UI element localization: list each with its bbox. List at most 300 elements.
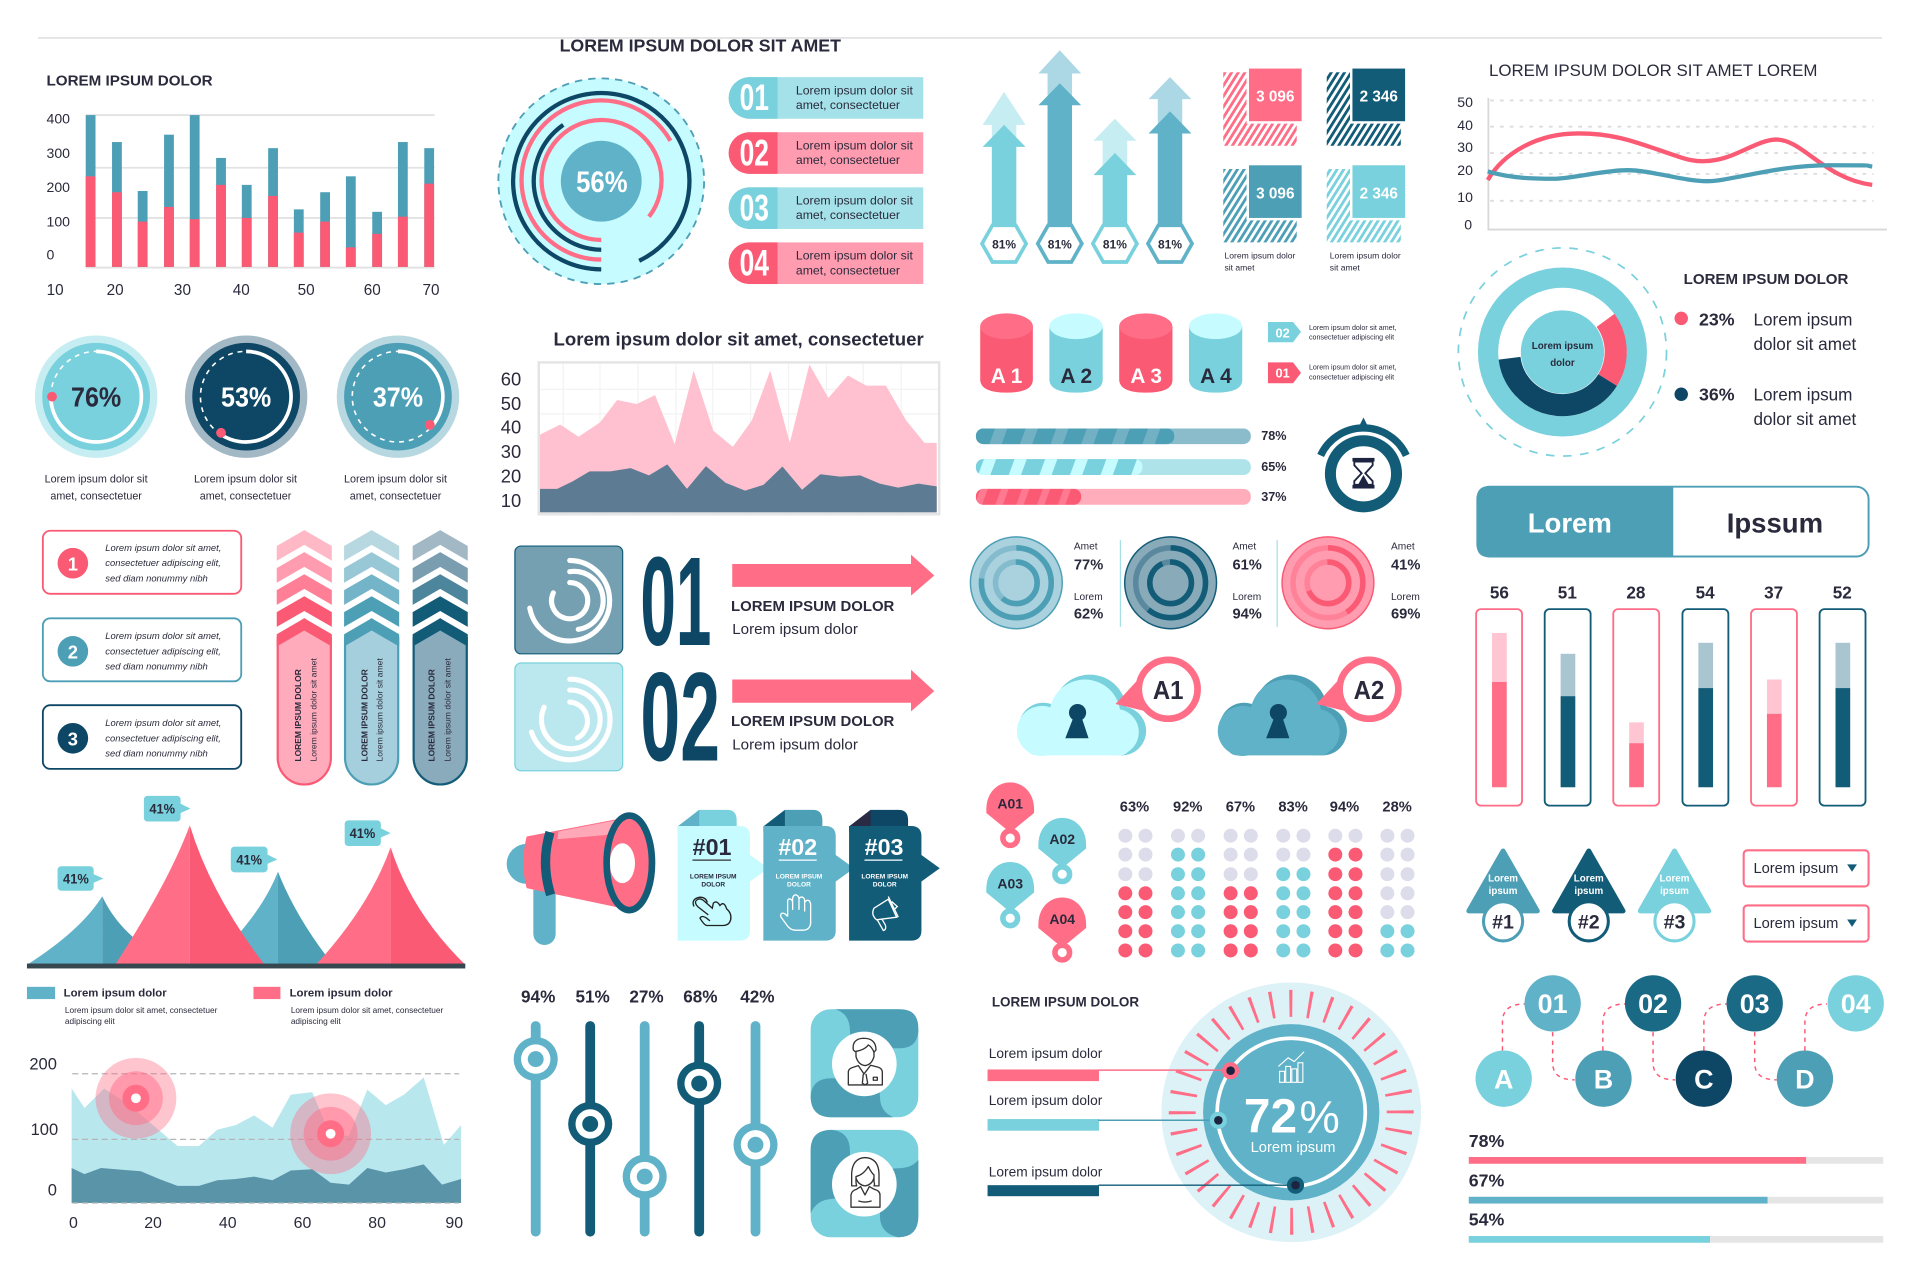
thermometer 28: 28 [1626,583,1645,603]
list item 01 [729,77,923,119]
line chart: LOREM IPSUM DOLOR SIT AMET LOREM [1489,61,1818,80]
area chart: lorem ipsum dolor sit amet, consectetuer: 30 [501,441,521,462]
callout box 3: sed diam nonummy nibh [105,748,208,759]
thermometer 51 [1545,583,1591,806]
slider 68% [677,1021,721,1237]
cylinder A4 [1189,313,1242,393]
dial callout 3 [988,1165,1304,1196]
area chart: lorem ipsum dolor sit amet, consectetuer: 40 [501,416,521,437]
41% label c: 41% [236,852,262,867]
chevron ribbon teal [344,530,399,784]
dial callout 1 [988,1046,1239,1081]
slider 27% [623,1021,667,1237]
donut legend: 23% [1699,310,1735,330]
toggle: lorem / ipssum [1477,486,1869,557]
icon: open hand [781,895,811,930]
bar chart: lorem ipsum dolor: 50 [298,282,315,299]
donut legend: dolor sit amet [1753,334,1857,354]
dot matrix chart: 28% [1382,800,1412,816]
triangle badge #3: #3 [1664,912,1685,934]
list item 02: Lorem ipsum dolor sit [796,138,913,152]
gauge 76%: 76% [71,381,121,412]
dot matrix chart: 83% [1278,800,1308,816]
up arrows with hexagons [982,50,1192,262]
node B [1575,1050,1632,1107]
node C [1676,1050,1732,1107]
step 02: Lorem ipsum dolor [732,736,858,753]
pin A04: A04 [1049,911,1075,927]
avatar female [811,1130,918,1237]
41% label b [144,796,190,822]
legend [27,987,444,1026]
callout box 1: sed diam nonummy nibh [105,573,208,584]
pin A03 [986,862,1034,926]
arrow 2: 81% [1048,238,1072,252]
area chart: lorem ipsum dolor sit amet, consectetuer [501,328,939,514]
callout box 1: Lorem ipsum dolor sit amet, [105,542,221,553]
concentric rings 3: Amet [1391,542,1415,553]
card #02 [763,810,854,941]
numbered list 01-04 [729,77,923,284]
icon: growth chart [1278,1052,1304,1082]
slider group: 42% [740,987,774,1007]
stat tile navy [1327,69,1405,146]
chevron ribbon teal: LOREM IPSUM DOLOR [359,669,369,762]
gauge 37%: Lorem ipsum dolor sit [344,473,447,485]
pin A02 [1038,818,1086,882]
donut chart [1458,248,1667,456]
tag 02: Lorem ipsum dolor sit amet, [1309,324,1397,332]
card #02: LOREM IPSUM [776,873,823,880]
thermometer 37 [1751,583,1797,806]
card #03 [849,810,940,941]
callout box 2: Lorem ipsum dolor sit amet, [105,630,221,641]
stat tile teal [1223,165,1302,273]
callout box 2: sed diam nonummy nibh [105,661,208,672]
bar chart: lorem ipsum dolor: 20 [107,282,124,299]
donut legend: LOREM IPSUM DOLOR [1684,271,1848,288]
node 04 [1828,975,1884,1032]
gauge 53%: 53% [221,381,271,412]
stat tile light teal: 2 346 [1360,185,1398,202]
concentric rings 1: Amet [1074,542,1098,553]
radial gauge 56% [498,78,704,284]
donut legend: dolor sit amet [1753,409,1857,429]
card #03: LOREM IPSUM [861,873,909,880]
node 03 [1727,975,1783,1032]
cylinder A3 [1119,313,1172,393]
area chart with target markers: 100 [31,1120,58,1139]
cloud A1 with bubble [1017,660,1198,756]
stat tile light teal: Lorem ipsum dolor [1330,250,1401,260]
gauge 76%: amet, consectetuer [50,491,142,503]
stat tile navy: 2 346 [1360,89,1398,106]
stat tile pink [1223,69,1302,146]
concentric rings 2: Amet [1232,542,1256,553]
node B: B [1594,1064,1613,1094]
thermometer 54 [1682,583,1728,806]
line chart: 50 [1457,94,1473,110]
progress bars [976,429,1286,505]
arrow 3 [1093,119,1137,262]
thermometer 52: 52 [1833,583,1852,603]
tag 01 [1268,362,1397,383]
node 01: 01 [1538,989,1568,1019]
dot column 63% [1118,829,1152,957]
slider 94% [514,1021,558,1237]
concentric rings 3: 41% [1391,557,1420,573]
radial gauge 56%: 56% [576,166,628,199]
bar chart: lorem ipsum dolor: 100 [47,214,70,230]
chevron ribbon pink: Lorem ipsum dolor sit amet [309,658,319,762]
concentric rings 1 [970,537,1103,629]
callout box 1: 1 [68,554,78,575]
area chart: lorem ipsum dolor sit amet, consectetuer: 50 [501,393,521,414]
triangle badge #3: ipsum [1660,886,1689,897]
target marker 2 [290,1093,371,1174]
tag 02 [1268,322,1397,342]
progress bars: 78% [1261,429,1286,443]
line chart: 40 [1457,117,1473,133]
line chart [1457,61,1887,233]
step 01: LOREM IPSUM DOLOR [731,598,895,615]
node A [1476,1050,1532,1107]
dot matrix chart: 63% [1120,800,1149,816]
area chart with target markers: 80 [368,1215,386,1232]
41% label c [231,847,277,872]
thermometer 56: 56 [1490,583,1509,603]
line chart: 0 [1464,217,1472,233]
bar chart: lorem ipsum dolor [47,73,440,299]
pin A01: A01 [997,796,1023,812]
gauge 53%: Lorem ipsum dolor sit [194,473,297,485]
list item 04: amet, consectetuer [796,263,900,277]
dial callout 3: Lorem ipsum dolor [989,1165,1103,1180]
donut legend [1674,271,1857,429]
gauge 37% [337,335,459,503]
pin A03: A03 [997,875,1023,891]
avatar male [811,1009,918,1117]
area chart with target markers: 20 [144,1215,162,1232]
card #03: #03 [865,834,904,860]
bar chart: lorem ipsum dolor: 40 [233,282,250,299]
concentric rings 2: 61% [1232,557,1262,573]
dot matrix chart: 94% [1330,800,1359,816]
thermometer bars [1476,583,1866,806]
dot matrix chart [1118,800,1415,957]
horizontal bar 54%: 54% [1469,1210,1505,1230]
legend: Lorem ipsum dolor sit amet, consectetuer [291,1005,444,1015]
tag 01: 01 [1276,366,1290,381]
triangle badge #1: ipsum [1489,886,1518,897]
stat tile light teal [1327,165,1405,273]
tag 01: Lorem ipsum dolor sit amet, [1309,364,1397,372]
bar chart: lorem ipsum dolor: 60 [364,282,381,299]
icon: megaphone outline [873,897,898,931]
bar chart: lorem ipsum dolor: 10 [47,282,64,299]
heading: lorem ipsum dolor sit amet: LOREM IPSUM DOLOR SIT AMET [560,35,841,55]
progress bars: 37% [1261,490,1286,504]
callout box 2: 2 [68,642,78,663]
cloud A1 with bubble: A1 [1153,677,1183,705]
donut chart: dolor [1550,358,1575,369]
stat tile teal: sit amet [1224,263,1255,273]
chevron ribbon teal: Lorem ipsum dolor sit amet [375,658,385,762]
tag 01: consectetuer adipiscing elit [1309,374,1394,382]
step 02 [515,646,934,787]
41% label b: 41% [149,802,175,817]
mountain chart [27,796,465,968]
list item 01: Lorem ipsum dolor sit [796,83,913,97]
icon: stopwatch with hourglass [1321,418,1406,507]
bar chart: lorem ipsum dolor: 300 [47,145,70,161]
arrow 2 [1038,50,1082,262]
area chart with target markers: 60 [294,1215,311,1232]
bar chart: lorem ipsum dolor: 0 [47,247,55,263]
bar chart: lorem ipsum dolor: 200 [47,179,70,195]
horizontal bar 78% [1469,1131,1883,1164]
gauge 76% [35,335,157,503]
node C: C [1694,1064,1714,1094]
slider 42% [733,1021,778,1237]
step 01: 01 [640,531,711,672]
cloud A2 with bubble [1218,660,1398,756]
arrow 4: 81% [1158,238,1182,252]
triangle badge #1: Lorem [1488,874,1518,885]
horizontal bar 78%: 78% [1469,1131,1505,1151]
dot column 94% [1328,829,1362,957]
pin A01 [986,782,1034,845]
list item 03: amet, consectetuer [796,208,900,222]
legend: Lorem ipsum dolor sit amet, consectetuer [65,1005,218,1015]
legend: Lorem ipsum dolor [290,988,393,1000]
slider group [514,987,778,1237]
list item 04: 04 [740,242,769,283]
callout box 2 [43,618,241,681]
dot column 28% [1380,829,1415,957]
area chart with target markers: 90 [445,1215,463,1232]
slider 51% [568,1021,612,1237]
area chart: lorem ipsum dolor sit amet, consectetuer: 20 [501,465,521,486]
area chart: lorem ipsum dolor sit amet, consectetuer: 60 [501,369,521,390]
horizontal bar 67% [1469,1170,1883,1204]
card #01 [678,810,768,941]
area chart: lorem ipsum dolor sit amet, consectetuer: Lorem ipsum dolor sit amet, consectetuer [553,328,924,349]
concentric rings 1: 62% [1074,606,1103,622]
donut chart: Lorem ipsum [1532,341,1593,352]
dropdown 1 [1744,850,1869,886]
chevron ribbon navy: LOREM IPSUM DOLOR [427,669,437,762]
line chart: 30 [1457,139,1473,155]
toggle: lorem / ipssum: Lorem [1528,508,1612,539]
node A: A [1494,1064,1513,1094]
list item 02: amet, consectetuer [796,153,900,167]
chevron ribbon pink: LOREM IPSUM DOLOR [293,669,303,762]
triangle badge #3: Lorem [1660,874,1690,885]
concentric rings 3: Lorem [1391,592,1420,603]
list item 01: 01 [740,77,769,118]
cylinder A1: A 1 [991,365,1022,388]
chevron ribbon navy [413,530,468,784]
dropdown 2 [1744,905,1869,942]
stat tile teal: 3 096 [1256,185,1294,202]
triangle badge #2 [1554,851,1623,941]
list item 03: 03 [740,187,769,228]
cylinder A3: A 3 [1130,365,1162,388]
node 01 [1524,975,1581,1032]
arrow 1: 81% [992,238,1016,252]
cylinder A2: A 2 [1061,365,1092,388]
card #02: #02 [778,834,817,860]
arrow 3: 81% [1103,238,1127,252]
cylinder A4: A 4 [1200,365,1232,388]
stat tile teal: Lorem ipsum dolor [1224,250,1296,260]
41% label d [345,820,391,846]
thermometer 51: 51 [1558,583,1577,603]
area chart: lorem ipsum dolor sit amet, consectetuer: 10 [501,490,521,511]
thermometer 52 [1820,583,1866,806]
area chart with target markers: 40 [219,1215,237,1232]
icon: megaphone [507,816,652,945]
thermometer 56 [1476,583,1522,806]
bar chart: lorem ipsum dolor: LOREM IPSUM DOLOR [47,73,213,90]
41% label a [58,866,103,891]
arrow 1 [982,92,1026,262]
dropdown 2: Lorem ipsum [1753,916,1838,932]
bar chart: lorem ipsum dolor: 30 [174,282,191,299]
progress bars: 65% [1261,460,1286,474]
tag 02: 02 [1276,325,1290,340]
list item 02: 02 [740,132,769,173]
thermometer 28 [1613,583,1659,806]
card #01: LOREM IPSUM [690,873,737,880]
gauge 37%: amet, consectetuer [350,491,442,503]
thermometer 37: 37 [1764,583,1783,603]
donut legend: 36% [1699,384,1735,404]
callout box 3 [43,705,241,769]
callout box 1: consectetuer adipiscing elit, [105,557,221,568]
triangle badge #2: ipsum [1574,886,1603,897]
slider group: 51% [576,987,610,1007]
callout box 3: consectetuer adipiscing elit, [105,732,221,743]
horizontal bar 54% [1469,1210,1883,1243]
card #02: DOLOR [787,881,811,888]
cloud A2 with bubble: A2 [1354,677,1384,705]
node 02: 02 [1638,989,1668,1019]
dial callout 1: Lorem ipsum dolor [989,1046,1103,1061]
arrow 4 [1148,77,1192,262]
dial title: LOREM IPSUM DOLOR [992,994,1139,1009]
legend: adipiscing elit [65,1016,115,1026]
node D [1777,1050,1833,1107]
area chart with target markers [29,1054,463,1232]
stat tile light teal: sit amet [1330,263,1360,273]
legend: Lorem ipsum dolor [64,988,167,1000]
pin A02: A02 [1049,831,1075,847]
list item 04 [729,242,923,284]
pin A04 [1038,897,1086,960]
41% label a: 41% [63,871,89,886]
triangle badge #1: #1 [1492,912,1514,934]
callout box 2: consectetuer adipiscing elit, [105,645,221,656]
area chart with target markers: 200 [29,1054,57,1073]
dot column 83% [1276,829,1310,957]
line chart: 20 [1457,162,1473,178]
bar chart: lorem ipsum dolor: 70 [423,282,440,299]
node D: D [1795,1064,1815,1094]
tag 02: consectetuer adipiscing elit [1309,334,1394,342]
area chart with target markers: 0 [69,1215,78,1232]
icon: pointing hand [693,897,731,926]
triangle badge #1 [1469,851,1537,941]
toggle: lorem / ipssum: Ipssum [1727,508,1823,539]
gauge 37%: 37% [373,381,423,412]
card #01: #01 [693,834,732,860]
list item 03 [729,187,923,229]
node 04: 04 [1841,989,1871,1019]
node 03: 03 [1740,989,1770,1019]
horizontal bar 67%: 67% [1469,1170,1505,1190]
concentric rings 1: 77% [1074,557,1103,573]
legend: adipiscing elit [291,1016,341,1026]
dot column 67% [1224,829,1258,957]
dot column 92% [1171,829,1205,957]
card #01: DOLOR [701,881,725,888]
list item 01: amet, consectetuer [796,98,900,112]
donut legend: Lorem ipsum [1753,310,1852,330]
radial dial 72% [1161,983,1421,1242]
chevron ribbon navy: Lorem ipsum dolor sit amet [443,658,453,762]
thermometer 54: 54 [1696,583,1715,603]
concentric rings 2: 94% [1232,606,1262,622]
flow diagram [1476,975,1884,1107]
slider group: 94% [521,987,555,1007]
dot matrix chart: 92% [1173,800,1202,816]
triangle badge #3 [1640,851,1709,941]
node 02 [1625,975,1681,1032]
target marker 1 [96,1058,176,1139]
concentric rings 1: Lorem [1074,592,1103,603]
area chart with target markers: 0 [48,1181,57,1200]
callout box 3: 3 [68,729,78,750]
card #03: DOLOR [873,881,897,888]
callout box 3: Lorem ipsum dolor sit amet, [105,717,221,728]
41% label d: 41% [350,826,375,841]
gauge 53%: amet, consectetuer [200,491,292,503]
bar chart: lorem ipsum dolor: 400 [47,111,70,127]
step 01: Lorem ipsum dolor [732,621,858,638]
radial dial 72%: Lorem ipsum [1251,1140,1336,1156]
dropdown 1: Lorem ipsum [1753,861,1838,877]
concentric rings 3: 69% [1391,606,1420,622]
list item 04: Lorem ipsum dolor sit [796,249,913,263]
chevron ribbon pink [277,530,332,784]
list item 03: Lorem ipsum dolor sit [796,193,913,207]
line chart: 10 [1457,189,1473,205]
concentric rings 2: Lorem [1232,592,1261,603]
dial callout 2: Lorem ipsum dolor [989,1093,1103,1108]
stat tile pink: 3 096 [1256,89,1294,106]
dot matrix chart: 67% [1226,800,1255,816]
step 01 [515,531,934,672]
step 02: LOREM IPSUM DOLOR [731,713,895,730]
slider group: 68% [683,987,718,1007]
gauge 76%: Lorem ipsum dolor sit [45,473,148,485]
slider group: 27% [629,987,664,1007]
concentric rings 2 [1125,537,1262,629]
radial dial 72%: 72% [1244,1091,1340,1144]
gauge 53% [185,335,307,503]
